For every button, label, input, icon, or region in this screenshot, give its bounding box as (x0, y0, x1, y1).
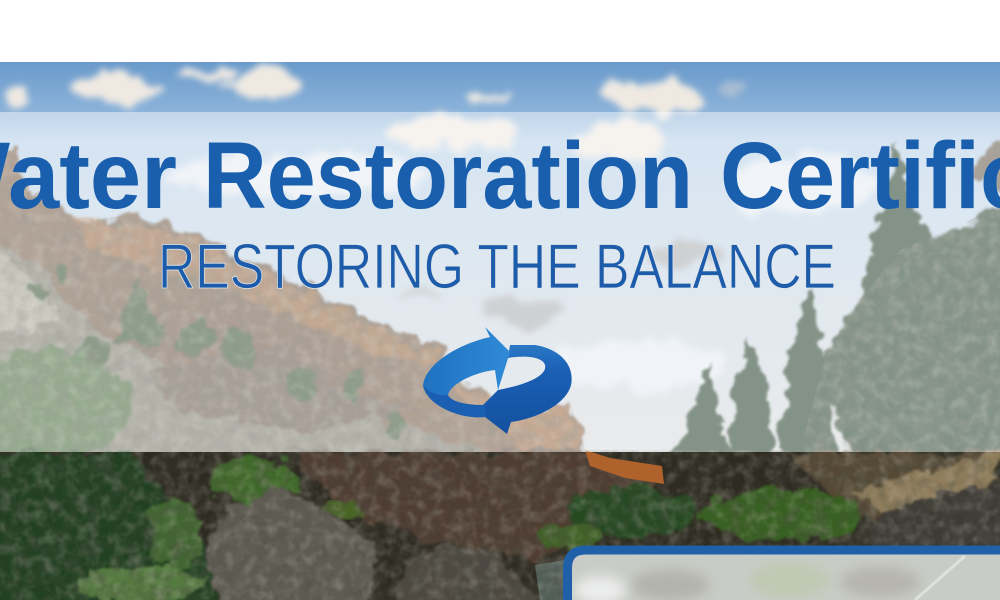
brown canyon wall (295, 452, 660, 560)
dark arrow (483, 345, 572, 434)
distant orange rim (585, 450, 664, 484)
panel faded photo (574, 562, 920, 600)
dark lower rim (423, 385, 486, 417)
panel: rounded blue frame (568, 550, 1000, 600)
green bush left (0, 350, 130, 460)
foreground valley (0, 452, 1000, 600)
sky (0, 62, 1000, 462)
light arrow (423, 327, 510, 395)
right slope (780, 452, 1000, 530)
icon: circular arrows (423, 327, 572, 434)
veil over upper photo (0, 112, 1000, 452)
foreground ground (0, 452, 1000, 600)
clouds (6, 66, 880, 389)
shrubs on slope (29, 263, 404, 439)
panel border (568, 550, 1000, 600)
sunlit rim of cliffs (70, 215, 582, 450)
pine trees right (675, 135, 1000, 462)
photo texture dark (0, 172, 1000, 600)
boulders (205, 491, 380, 600)
river (535, 560, 565, 600)
subtitle: RESTORING THE BALANCE (158, 232, 836, 302)
left dark green trees (0, 452, 220, 600)
cliffs (0, 144, 586, 452)
title: Restoration (203, 123, 693, 229)
title: ater (8, 123, 177, 229)
pale talus slope (0, 245, 482, 452)
panel fill (568, 550, 1000, 600)
title (0, 123, 1000, 229)
centre green bushes (564, 486, 696, 538)
